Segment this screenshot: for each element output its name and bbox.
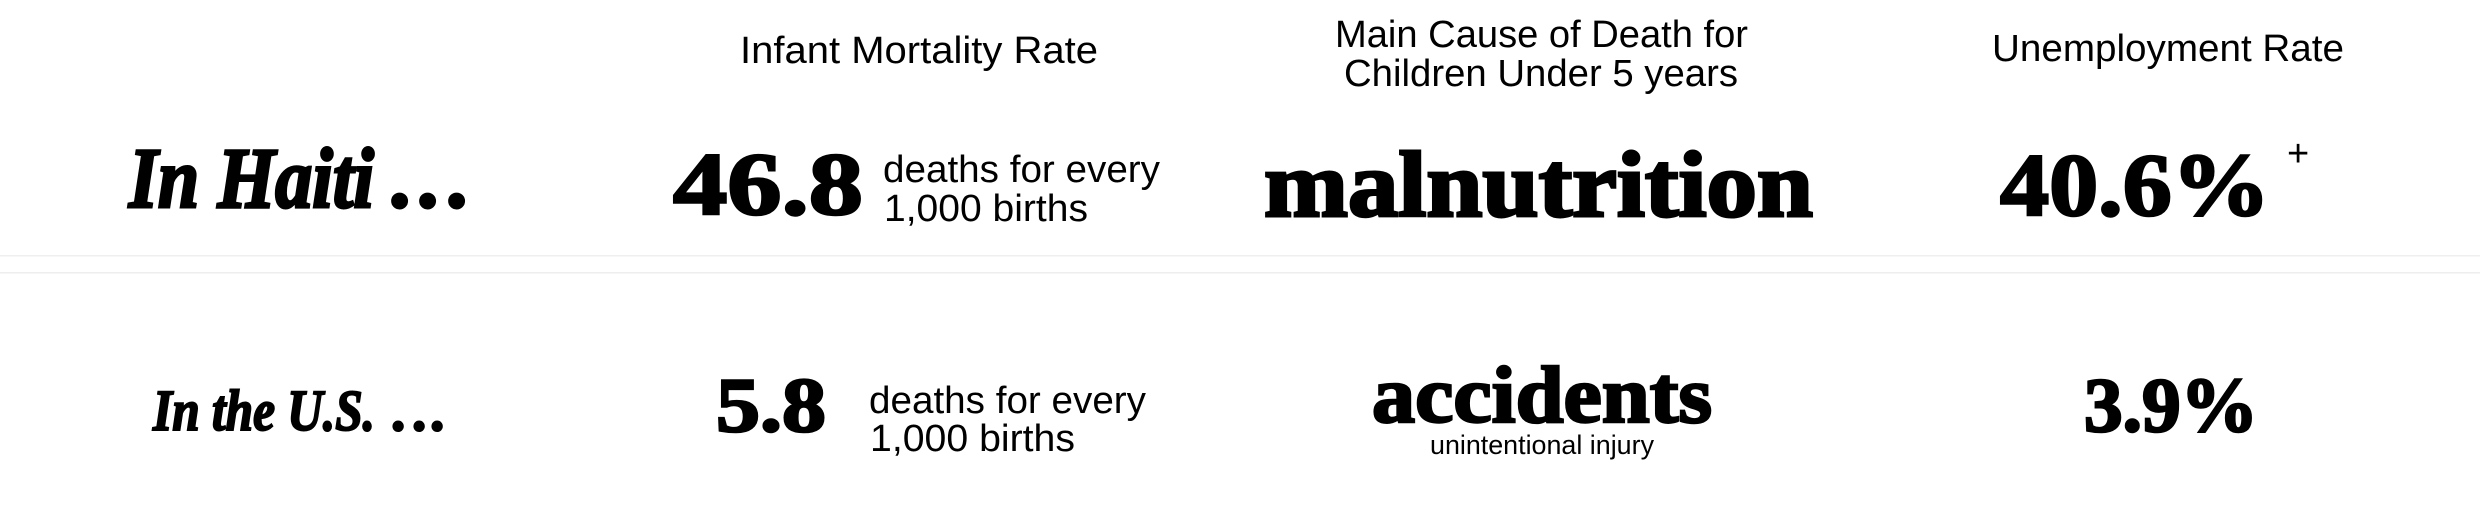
unemployment value: U.S.: 3.9% xyxy=(2084,362,2258,448)
heading: main cause of death: Main Cause of Death for xyxy=(1335,14,1748,56)
infant mortality value: U.S.: deaths for every xyxy=(869,380,1146,422)
row label: In Haiti: ... xyxy=(392,130,470,226)
heading: infant mortality rate: Infant Mortality Rate xyxy=(740,30,1098,72)
row label: In Haiti: In Haiti xyxy=(128,130,374,226)
row label: In the U.S.: In the U.S. xyxy=(152,378,375,443)
row: United States xyxy=(152,352,2258,460)
infant mortality value: U.S.: 1,000 births xyxy=(870,418,1075,460)
heading: main cause of death xyxy=(1335,14,1748,95)
unemployment value: Haiti: + xyxy=(2287,133,2309,175)
infant mortality value: Haiti: deaths for every xyxy=(883,149,1160,191)
row label: In the U.S.: ... xyxy=(393,378,446,443)
main cause value: accidents: unintentional injury xyxy=(1430,430,1654,460)
infant mortality value: Haiti: 46.8 xyxy=(673,136,863,234)
infant mortality value: U.S.: 5.8 xyxy=(716,362,826,448)
heading: main cause of death: Children Under 5 years xyxy=(1344,53,1738,95)
heading: unemployment rate: Unemployment Rate xyxy=(1992,28,2344,70)
unemployment value: Haiti: 40.6% xyxy=(2000,137,2270,235)
main cause value: accidents: accidents xyxy=(1372,352,1712,440)
infant mortality value: U.S. xyxy=(716,362,1146,460)
infant mortality value: Haiti: 1,000 births xyxy=(884,188,1088,230)
main cause value: malnutrition: malnutrition xyxy=(1264,134,1813,237)
row: Haiti xyxy=(128,130,2309,237)
infant mortality value: Haiti xyxy=(673,136,1160,234)
